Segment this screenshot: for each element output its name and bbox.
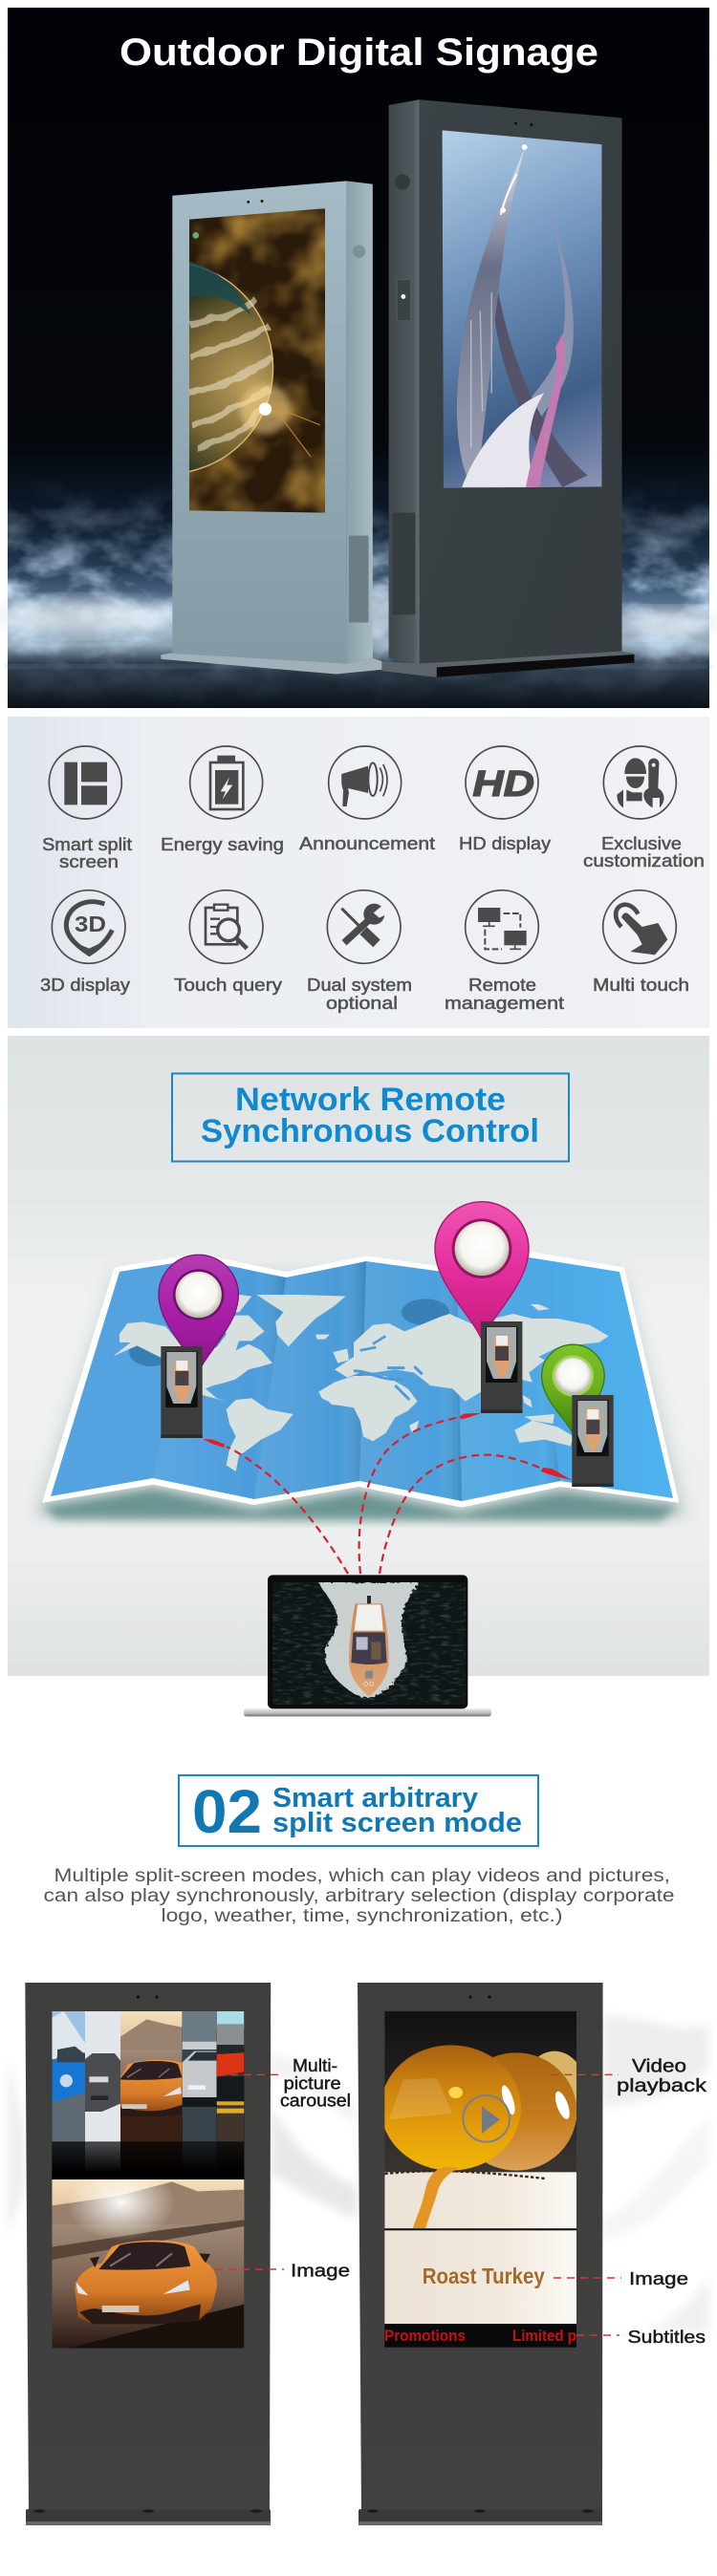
panel: feature icons [8, 717, 709, 1028]
carousel reflection [52, 2142, 244, 2179]
pin: pink [435, 1202, 529, 1340]
icon labels: HD display [459, 834, 551, 853]
icon labels: Smart split [42, 835, 132, 854]
icon: remote management [466, 891, 538, 963]
icon: 3D display [52, 891, 125, 963]
icon labels: 3D display [40, 976, 130, 995]
subtitle text: Limited p [512, 2327, 576, 2345]
icon: exclusive customization worker [603, 746, 676, 819]
heading box: Synchronous Control [201, 1113, 539, 1149]
icon: touch query [189, 891, 263, 963]
panel: network remote synchronous control [8, 1036, 709, 1716]
map soft shadow [31, 1271, 690, 1521]
description paragraph: logo, weather, time, synchronization, etc.) [161, 1906, 562, 1926]
cream image [384, 2230, 576, 2324]
kiosk: Asia [481, 1321, 522, 1413]
image text: Roast Turkey [423, 2264, 545, 2288]
kiosk: America [161, 1346, 203, 1438]
callout: subtitles [576, 2328, 706, 2347]
callout: multi-picture carousel: picture [284, 2073, 341, 2093]
callout: video playback: Video [632, 2057, 686, 2077]
callout: video playback [552, 2057, 707, 2096]
stand: right kiosk [358, 1983, 603, 2525]
pin: green [542, 1344, 604, 1434]
icon labels: customization [583, 851, 705, 870]
kiosk: Oceania [572, 1395, 614, 1487]
title: Outdoor Digital Signage [120, 32, 598, 74]
icon labels [40, 834, 705, 1013]
callout: multi-picture carousel [217, 2056, 351, 2110]
heading box with 02 [179, 1775, 538, 1846]
continents: americas [113, 1295, 360, 1471]
subtitle text [384, 2327, 576, 2345]
icon labels: management [445, 994, 564, 1013]
heading box with 02: split screen mode [272, 1808, 522, 1838]
callout: video playback: playback [617, 2076, 707, 2096]
callout: multi-picture carousel: Multi- [293, 2056, 337, 2075]
arrow: laptop to Oceania kiosk [380, 1455, 572, 1574]
play button [463, 2095, 510, 2142]
icon labels: Touch query [174, 976, 282, 995]
heading box [172, 1074, 569, 1162]
video picture [380, 2011, 586, 2228]
icon labels: optional [326, 994, 398, 1013]
callout: multi-picture carousel: carousel [280, 2091, 351, 2110]
icon: smart split screen [49, 746, 121, 819]
large car image [52, 2164, 244, 2349]
screen: planet [189, 208, 325, 512]
pin: purple [159, 1255, 238, 1372]
heading box with 02: 02 [192, 1777, 262, 1846]
icon labels: Energy saving [161, 835, 284, 854]
callout: right image: Image [629, 2268, 688, 2288]
panel: smart arbitrary split screen mode [8, 1775, 709, 2525]
callout: subtitles: Subtitles [627, 2328, 706, 2347]
screen: video, image, subtitles [380, 2011, 586, 2348]
subtitle bar [384, 2324, 576, 2348]
icon: HD display [466, 746, 538, 819]
panel: hero outdoor digital signage [0, 8, 717, 708]
stand: left kiosk [25, 1983, 271, 2525]
subtitle text: Promotions [384, 2327, 466, 2345]
description paragraph: Multiple split-screen modes, which can play videos and pictures, [54, 1866, 670, 1886]
sign: light grey kiosk with planet screen [161, 181, 382, 675]
continents: eurasia africa australia [318, 1299, 609, 1446]
icon labels: Exclusive [601, 834, 682, 853]
carousel picture columns [52, 2011, 244, 2142]
icon: energy saving battery [190, 746, 263, 819]
icon: multi touch [603, 891, 676, 963]
description paragraph [44, 1866, 674, 1926]
heading box: Network Remote [235, 1082, 506, 1118]
callout: left image: Image [291, 2261, 350, 2280]
icon labels: Dual system [307, 976, 412, 995]
icon: dual system tools [327, 891, 401, 963]
hero background with smoke [0, 8, 717, 708]
icon labels: Announcement [299, 834, 435, 853]
divider [384, 2228, 576, 2230]
icon: 3D display: 3D [75, 912, 106, 936]
description paragraph: can also play synchronously, arbitrary selection (display corporate [44, 1886, 674, 1906]
sign: dark kiosk with ribbon screen [381, 99, 634, 677]
icon: announcement megaphone [329, 746, 402, 819]
arrow: laptop to Asia kiosk [359, 1413, 482, 1574]
laptop with boat image [244, 1575, 491, 1716]
icon labels: Remote [468, 976, 536, 995]
arrow: laptop to America kiosk [203, 1439, 348, 1574]
heading box with 02: Smart arbitrary [272, 1783, 478, 1814]
icon labels: screen [59, 852, 119, 871]
network panel background [8, 1036, 709, 1676]
screen: ribbon structure [439, 128, 603, 489]
icon labels: Multi touch [593, 976, 689, 995]
world map [42, 1252, 679, 1508]
background swoosh [8, 2016, 709, 2331]
icon: HD display: HD [472, 764, 534, 805]
screen: multi-picture carousel and image [52, 2011, 244, 2349]
icon panel background [8, 717, 709, 1028]
